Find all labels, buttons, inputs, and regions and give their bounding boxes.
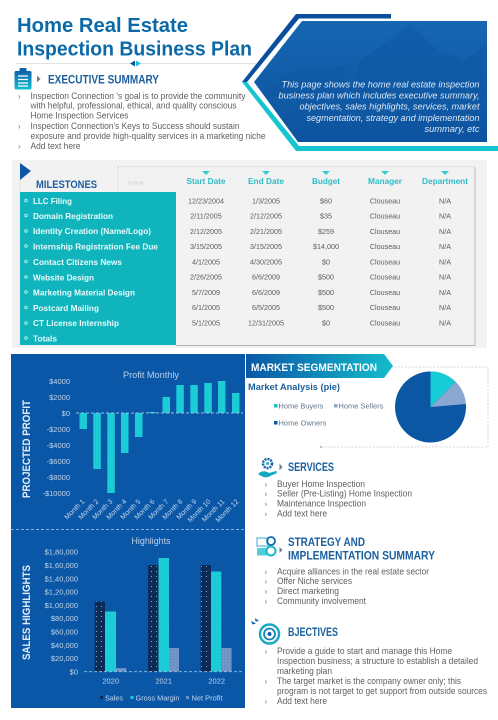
table rows: 5/1/2005 bbox=[192, 318, 220, 328]
table rows: Clouseau bbox=[370, 242, 400, 251]
banner text: segmentation, strategy and implementation bbox=[306, 113, 480, 123]
table rows: 12/31/2005 bbox=[248, 318, 284, 328]
table rows: N/A bbox=[439, 212, 451, 220]
bar chart: monthly profit: -$4000 bbox=[47, 441, 70, 450]
text block: objectives: Inspection business; a structure to establish a detailed bbox=[277, 656, 478, 666]
heading: executive summary: EXECUTIVE SUMMARY bbox=[48, 74, 159, 86]
text block: executive summary: Add text here bbox=[30, 141, 80, 151]
title bbox=[17, 14, 252, 60]
text block: strategy: Acquire alliances in the real estate sector bbox=[277, 566, 429, 576]
bar chart: sales highlights: $1,80,000 bbox=[45, 548, 78, 556]
heading: strategy and implementation summary: STRATEGY AND bbox=[288, 537, 365, 549]
chart legend: Sales bbox=[105, 694, 123, 702]
heading: milestones: MILESTONES bbox=[36, 179, 97, 191]
text block: executive summary: with helpful, professional, ethical, and quality conscious bbox=[30, 100, 237, 110]
bar chart: monthly profit: Month 3 bbox=[92, 498, 114, 521]
milestone list: Domain Registration bbox=[33, 212, 113, 221]
table header bbox=[186, 171, 468, 186]
table rows: N/A bbox=[439, 272, 451, 282]
text block: services: Maintenance Inspection bbox=[277, 498, 366, 508]
title: Inspection Business Plan bbox=[17, 38, 252, 60]
text block: strategy: › bbox=[264, 587, 268, 596]
bar chart: monthly profit: -$6000 bbox=[47, 457, 70, 466]
chevrons: »»» bbox=[127, 178, 145, 187]
table rows: Clouseau bbox=[370, 257, 400, 266]
text block: strategy bbox=[264, 566, 429, 606]
text block: services: Seller (Pre-Listing) Home Inspection bbox=[277, 488, 412, 498]
text block: executive summary bbox=[18, 91, 266, 151]
milestone list: Identity Creation (Name/Logo) bbox=[33, 227, 151, 236]
text block: services: Buyer Home Inspection bbox=[277, 479, 365, 489]
table rows: $500 bbox=[318, 303, 334, 312]
text block: strategy: Offer Niche services bbox=[277, 576, 352, 586]
banner text: business plan which includes executive summary, bbox=[278, 90, 480, 100]
table rows: N/A bbox=[439, 288, 451, 297]
label: projected profit: PROJECTED PROFIT bbox=[21, 400, 33, 498]
table rows: Clouseau bbox=[370, 303, 400, 312]
title divider bbox=[16, 60, 256, 66]
table rows: N/A bbox=[439, 227, 451, 236]
bar chart: sales highlights: 2020 bbox=[102, 676, 119, 686]
pie legend: Home Buyers bbox=[278, 402, 324, 410]
table rows: 4/30/2005 bbox=[250, 257, 282, 266]
text block: objectives bbox=[264, 646, 487, 706]
heading: strategy and implementation summary: IMPLEMENTATION SUMMARY bbox=[288, 550, 435, 562]
panel: milestones table bbox=[12, 160, 487, 348]
bar chart: sales highlights bbox=[45, 548, 243, 686]
milestone list: Totals bbox=[33, 334, 57, 344]
table header: End Date bbox=[248, 176, 284, 186]
text block: services: › bbox=[264, 490, 268, 498]
table rows bbox=[188, 196, 451, 328]
milestone list: Marketing Material Design bbox=[33, 288, 135, 298]
bar chart: monthly profit: Month 10 bbox=[187, 498, 212, 524]
banner house silhouette bbox=[262, 24, 487, 100]
text block: objectives: marketing plan bbox=[277, 666, 332, 676]
table rows: Clouseau bbox=[370, 318, 400, 328]
heading banner: market segmentation: MARKET SEGMENTATION bbox=[251, 362, 377, 374]
label: sales highlights: SALES HIGHLIGHTS bbox=[21, 565, 33, 660]
milestone list: Website Design bbox=[33, 274, 94, 282]
text block: executive summary: › bbox=[18, 122, 21, 131]
table rows: 2/21/2005 bbox=[250, 227, 282, 236]
pie chart bbox=[395, 372, 466, 442]
text block: strategy: › bbox=[264, 577, 268, 586]
table header: Manager bbox=[368, 176, 403, 186]
table rows: N/A bbox=[439, 303, 451, 312]
text block: executive summary: › bbox=[18, 92, 21, 101]
banner text: summary, etc bbox=[424, 124, 480, 134]
table rows: N/A bbox=[439, 257, 451, 266]
text block: services bbox=[264, 479, 412, 518]
table rows: Clouseau bbox=[370, 288, 400, 297]
pie legend bbox=[274, 402, 384, 428]
text block: objectives: Provide a guide to start and manage this Home bbox=[277, 646, 452, 656]
table rows: 6/1/2005 bbox=[192, 303, 220, 312]
text block: strategy: › bbox=[264, 568, 268, 576]
text block: objectives: › bbox=[264, 677, 268, 686]
pie legend: Home Owners bbox=[278, 418, 327, 428]
bar chart: monthly profit: Month 2 bbox=[78, 498, 100, 521]
table rows: N/A bbox=[439, 242, 451, 251]
table rows: 12/23/2004 bbox=[188, 196, 224, 206]
icon: clipboard bbox=[14, 68, 32, 90]
table rows: N/A bbox=[439, 196, 451, 206]
text block: objectives: program is not target to get support from outside sources bbox=[277, 686, 487, 696]
table rows: $35 bbox=[320, 212, 332, 220]
text block: objectives: Add text here bbox=[277, 696, 327, 706]
bar chart: sales highlights: $80,000 bbox=[51, 614, 78, 623]
bar chart: monthly profit: Month 7 bbox=[148, 498, 170, 521]
arrow: strategy bbox=[280, 547, 282, 553]
chart legend bbox=[100, 694, 222, 702]
panel: market segmentation bbox=[246, 354, 488, 448]
bar chart: sales highlights: $20,000 bbox=[51, 654, 78, 663]
bar chart: monthly profit: Month 8 bbox=[162, 498, 184, 521]
table rows: 5/7/2009 bbox=[192, 288, 220, 297]
table rows: Clouseau bbox=[370, 272, 400, 282]
milestone list bbox=[20, 192, 176, 345]
bar chart: sales highlights: $1,40,000 bbox=[45, 574, 78, 584]
table rows: $60 bbox=[320, 196, 332, 206]
icon: objectives target bbox=[251, 618, 279, 644]
heading: strategy and implementation summary bbox=[288, 537, 435, 562]
table rows: 3/15/2005 bbox=[190, 242, 222, 251]
chart title: profit monthly: Profit Monthly bbox=[123, 370, 180, 380]
bar chart: monthly profit bbox=[42, 377, 243, 524]
text block: services: › bbox=[264, 500, 268, 508]
milestone list: LLC Filing bbox=[33, 197, 72, 206]
bar chart: sales highlights: 2021 bbox=[155, 676, 172, 686]
subheading: market analysis: Market Analysis (pie) bbox=[248, 382, 340, 392]
banner text bbox=[278, 80, 480, 134]
text block: objectives: › bbox=[264, 697, 268, 706]
text block: executive summary: Inspection Connection's Keys to Success should sustain bbox=[30, 121, 240, 131]
chart legend: Gross Margin bbox=[136, 694, 180, 702]
milestone list: Internship Registration Fee Due bbox=[33, 242, 158, 252]
milestone list: Contact Citizens News bbox=[33, 258, 122, 267]
table rows: 1/3/2005 bbox=[252, 196, 280, 206]
text block: services: › bbox=[264, 480, 268, 489]
bar chart: sales highlights: $1,20,000 bbox=[45, 588, 78, 596]
icon: milestones triangle bbox=[20, 163, 31, 180]
bar chart: sales highlights: 2022 bbox=[208, 676, 225, 686]
table rows: 4/1/2005 bbox=[192, 257, 220, 266]
table header: Start Date bbox=[186, 176, 226, 186]
bar chart: monthly profit: Month 9 bbox=[176, 498, 198, 521]
table rows: Clouseau bbox=[370, 212, 400, 220]
table rows: $500 bbox=[318, 272, 334, 282]
panel: intro banner bbox=[242, 14, 498, 151]
text block: strategy: › bbox=[264, 597, 268, 606]
text block: strategy: Community involvement bbox=[277, 596, 366, 606]
bar chart: monthly profit: $2000 bbox=[49, 393, 70, 402]
text block: objectives: › bbox=[264, 647, 268, 656]
bar chart: monthly profit: Month 12 bbox=[215, 498, 240, 524]
heading: objectives: BJECTIVES bbox=[288, 627, 338, 639]
heading banner: market segmentation bbox=[246, 354, 393, 378]
text block: executive summary: › bbox=[18, 142, 21, 151]
table rows: 3/15/2005 bbox=[250, 242, 282, 251]
chart title: highlights: Highlights bbox=[132, 536, 171, 546]
title: Home Real Estate bbox=[17, 14, 188, 37]
table header: Budget bbox=[312, 176, 340, 186]
pie legend: Home Sellers bbox=[338, 402, 384, 410]
milestone list: Postcard Mailing bbox=[33, 304, 99, 313]
bar chart: sales highlights: $1,60,000 bbox=[45, 561, 78, 570]
table rows: Clouseau bbox=[370, 227, 400, 236]
table header: Department bbox=[422, 176, 468, 186]
table rows: 6/5/2005 bbox=[252, 303, 280, 312]
bar chart: sales highlights: $40,000 bbox=[51, 641, 78, 650]
bar chart: sales highlights: $1,00,000 bbox=[45, 601, 78, 610]
table rows: $259 bbox=[318, 227, 334, 236]
milestone list: CT License Internship bbox=[33, 319, 119, 328]
bar chart: monthly profit: Month 4 bbox=[106, 498, 128, 521]
bar chart: monthly profit: -$10000 bbox=[42, 489, 70, 498]
table rows: 2/12/2005 bbox=[190, 227, 222, 236]
text block: services: › bbox=[264, 510, 268, 518]
chart legend: Net Profit bbox=[192, 694, 222, 702]
table rows: $14,000 bbox=[313, 242, 339, 251]
bar chart: monthly profit: Month 11 bbox=[201, 498, 226, 524]
banner text: objectives, sales highlights, services, market bbox=[300, 102, 480, 112]
table rows: 6/6/2009 bbox=[252, 288, 280, 297]
icon: strategy bbox=[257, 537, 276, 556]
bar chart: sales highlights: $60,000 bbox=[51, 628, 78, 636]
arrow: executive summary bbox=[37, 76, 40, 82]
bar chart: monthly profit: Month 6 bbox=[134, 498, 156, 521]
bar chart: monthly profit: $0 bbox=[62, 409, 70, 418]
table rows: 2/12/2005 bbox=[250, 212, 282, 220]
text block: strategy: Direct marketing bbox=[277, 586, 339, 596]
table rows: N/A bbox=[439, 318, 451, 328]
text block: executive summary: Inspection Connection 's goal is to provide the community bbox=[30, 91, 246, 101]
table rows: Clouseau bbox=[370, 196, 400, 206]
table rows: $500 bbox=[318, 288, 334, 297]
text block: objectives: The target market is the company owner only; this bbox=[277, 676, 461, 686]
bar chart: monthly profit: Month 5 bbox=[120, 498, 142, 521]
text block: executive summary: exposure and provide high-quality services in a marketing niche bbox=[30, 131, 266, 141]
table rows: 2/26/2005 bbox=[190, 272, 222, 282]
banner text: This page shows the home real estate inspection bbox=[282, 80, 480, 90]
icon: services bbox=[258, 459, 277, 477]
arrow: services bbox=[280, 464, 282, 470]
bar chart: sales highlights: $0 bbox=[70, 668, 78, 676]
panel: charts bbox=[11, 354, 245, 708]
text block: services: Add text here bbox=[277, 508, 327, 518]
table rows: $0 bbox=[322, 318, 330, 328]
bar chart: monthly profit: -$8000 bbox=[47, 473, 70, 482]
heading: services: SERVICES bbox=[288, 462, 334, 474]
table rows: $0 bbox=[322, 257, 330, 266]
table rows: 2/11/2005 bbox=[190, 212, 222, 220]
bar chart: monthly profit: -$2000 bbox=[47, 425, 70, 434]
table rows: 6/6/2009 bbox=[252, 272, 280, 282]
text block: executive summary: Home Inspection Services bbox=[30, 110, 129, 120]
bar chart: monthly profit: Month 1 bbox=[64, 498, 86, 521]
bar chart: monthly profit: $4000 bbox=[49, 377, 70, 386]
